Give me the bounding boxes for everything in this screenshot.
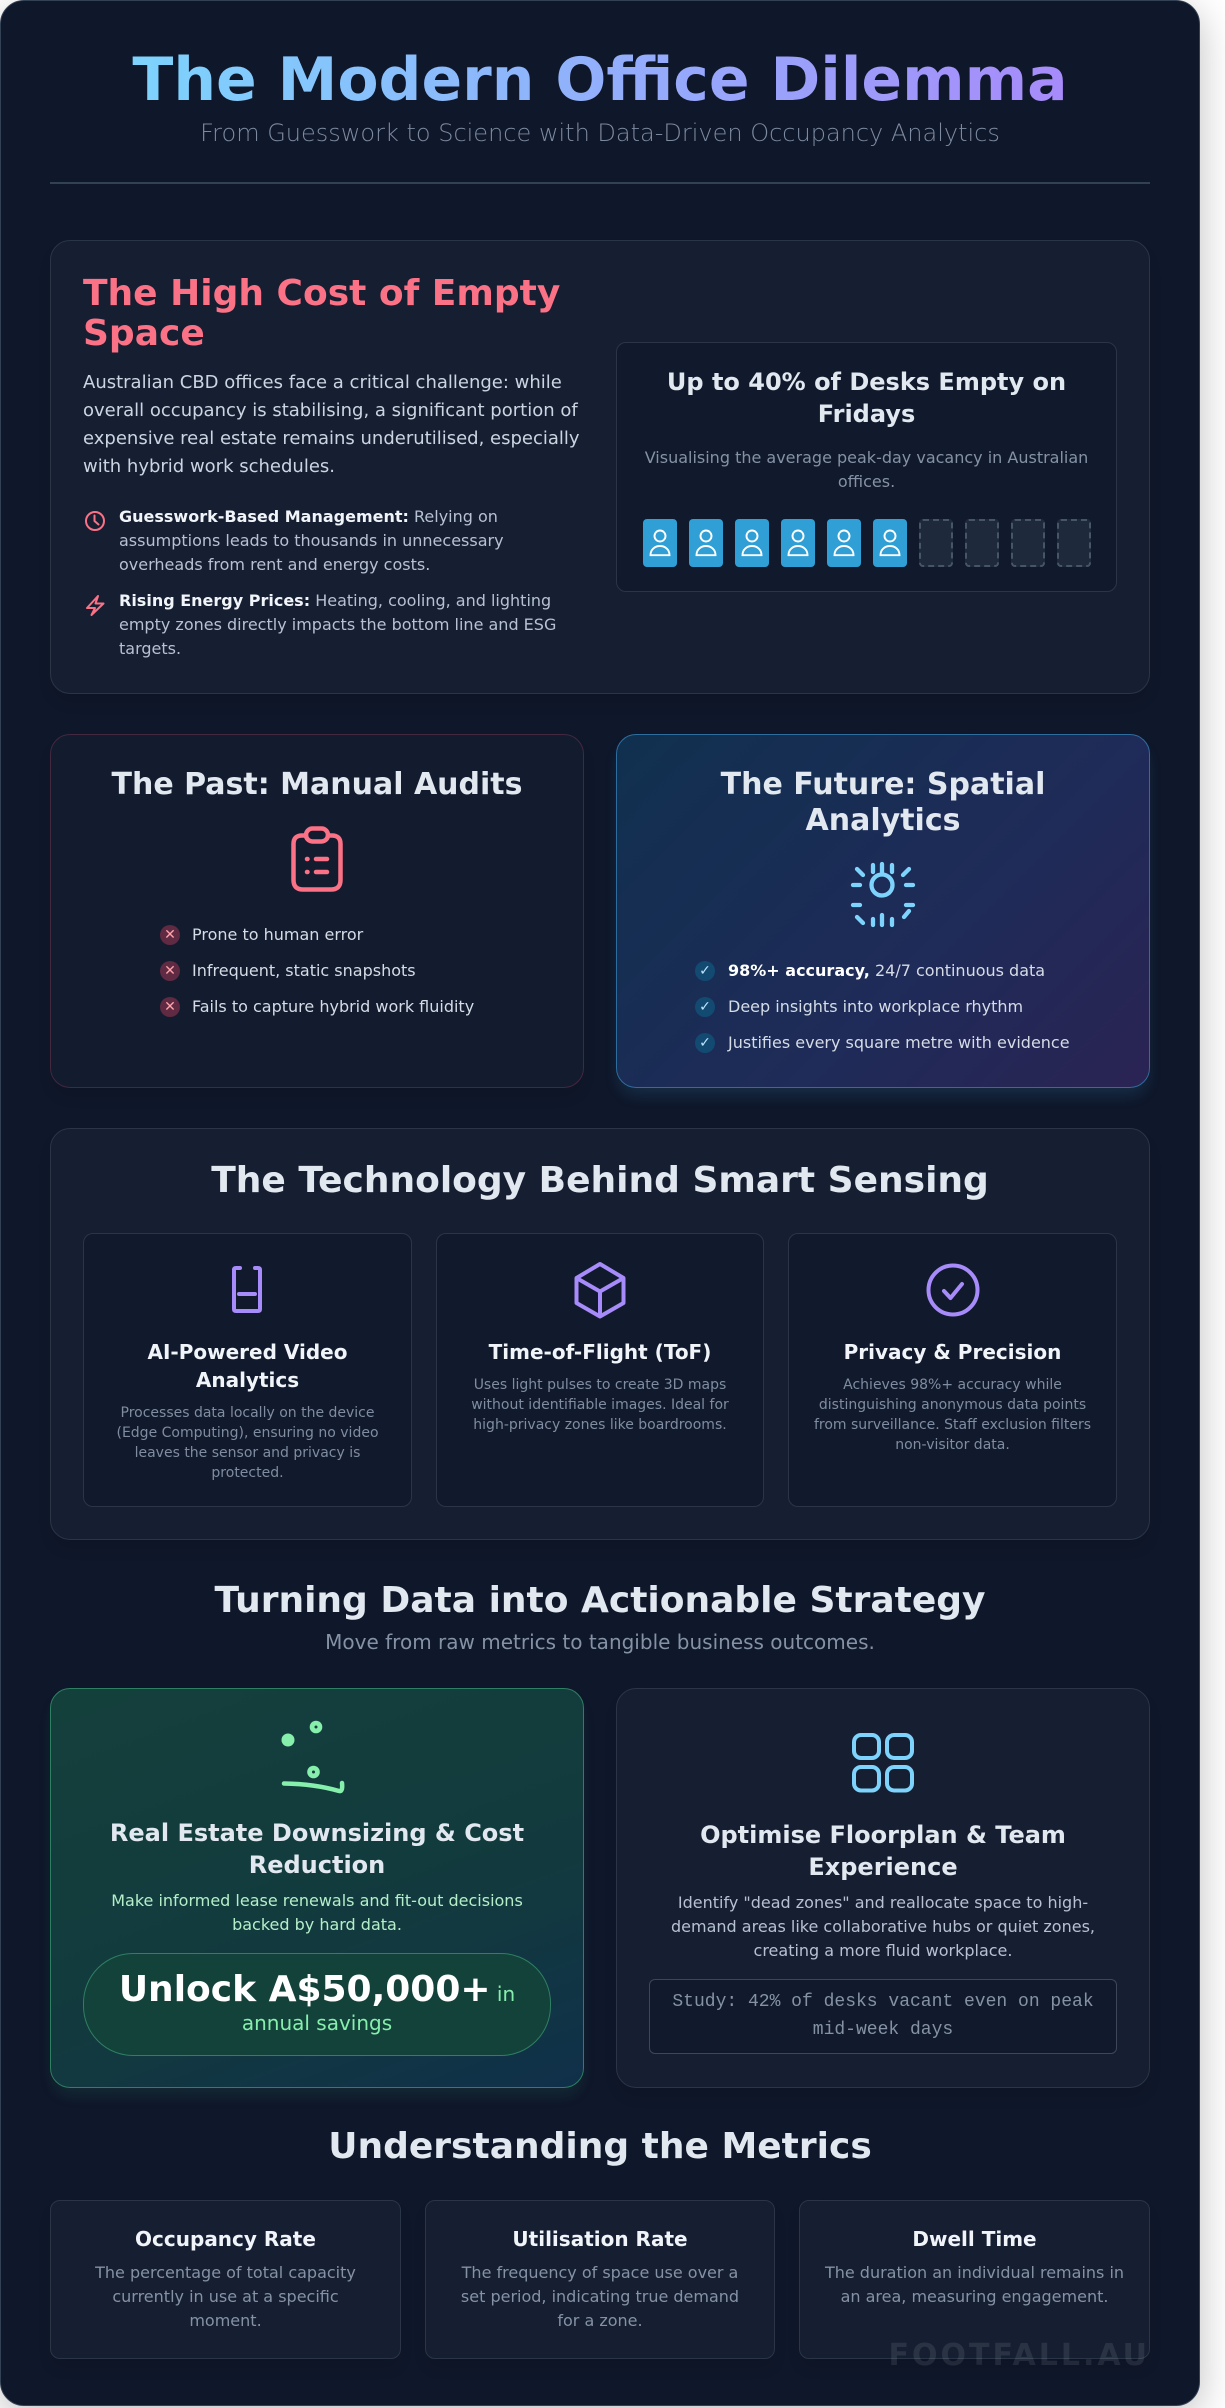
heading: actionable strategy: Turning Data into Actionable Strategy <box>214 1580 986 1621</box>
study callout <box>649 1979 1117 2054</box>
heading: past: The Past: Manual Audits <box>112 767 522 802</box>
panel: downsizing <box>50 1688 584 2088</box>
AI video heading: AI-Powered Video Analytics <box>148 1340 347 1392</box>
panel: desk vacancy visual <box>616 342 1117 592</box>
vacancy caption: Visualising the average peak-day vacancy in Australian offices. <box>645 448 1088 491</box>
ToF text: Uses light pulses to create 3D maps without identifiable images. Ideal for high-privacy zones like boardrooms. <box>471 1377 729 1433</box>
bullet: energy: Rising Energy Prices: Heating, cooling, and lighting empty zones directly impacts the bottom line and ESG targets. <box>119 590 556 658</box>
future list: 98%+ accuracy, 24/7 continuous data <box>728 961 1045 980</box>
desk tiles chart <box>643 519 1091 567</box>
card: ToF <box>436 1233 764 1507</box>
past list: Infrequent, static snapshots <box>192 961 416 980</box>
utilisation text: The frequency of space use over a set period, indicating true demand for a zone. <box>461 2263 739 2330</box>
heading: vacancy: Up to 40% of Desks Empty on Fridays <box>667 368 1066 428</box>
future list: ✓ <box>699 999 711 1015</box>
heading: metrics: Understanding the Metrics <box>328 2126 872 2167</box>
utilisation heading: Utilisation Rate <box>512 2227 688 2251</box>
panel: optimise <box>616 1688 1150 2088</box>
dwell text: The duration an individual remains in an area, measuring engagement. <box>825 2263 1124 2306</box>
future list: Justifies every square metre with evidence <box>728 1033 1070 1052</box>
panel: technology <box>50 1128 1150 1540</box>
ToF heading: Time-of-Flight (ToF) <box>489 1340 711 1364</box>
intro paragraph: Australian CBD offices face a critical challenge: while overall occupancy is stabilising, a significant portion of expensive real estate remains underutilised, especially with hybrid work schedules. <box>83 372 580 477</box>
past list: ✕ <box>164 927 176 943</box>
downsizing heading: Real Estate Downsizing & Cost Reduction <box>110 1819 524 1879</box>
card: dwell <box>799 2200 1150 2359</box>
occupancy text: The percentage of total capacity currently in use at a specific moment. <box>95 2263 356 2330</box>
past list: Fails to capture hybrid work fluidity <box>192 997 474 1016</box>
future list <box>695 961 1070 1053</box>
dwell heading: Dwell Time <box>912 2227 1037 2251</box>
bullet: guesswork: Guesswork-Based Management: Relying on assumptions leads to thousands in unnecessary overheads from rent and energy costs. <box>119 506 504 574</box>
card: privacy <box>788 1233 1117 1507</box>
past list: Prone to human error <box>192 925 363 944</box>
occupancy heading: Occupancy Rate <box>135 2227 316 2251</box>
panel: the past <box>50 734 584 1088</box>
savings pill: Unlock A$50,000+ in annual savings <box>119 1969 515 2035</box>
panel: the high cost of empty space <box>50 240 1150 694</box>
future list: ✓ <box>699 1035 711 1051</box>
heading: technology: The Technology Behind Smart Sensing <box>211 1160 989 1201</box>
past list <box>160 925 474 1017</box>
future list: ✓ <box>699 963 711 979</box>
privacy heading: Privacy & Precision <box>844 1340 1061 1364</box>
optimise text: Identify "dead zones" and reallocate space to high-demand areas like collaborative hubs or quiet zones, creating a more fluid workplace. <box>671 1893 1095 1960</box>
sub-heading: actionable strategy: Move from raw metrics to tangible business outcomes. <box>325 1630 875 1654</box>
downsizing text: Make informed lease renewals and fit-out decisions backed by hard data. <box>111 1891 523 1934</box>
subtitle: From Guesswork to Science with Data-Driven Occupancy Analytics <box>200 119 1000 147</box>
past list: ✕ <box>164 963 176 979</box>
optimise heading: Optimise Floorplan & Team Experience <box>700 1821 1066 1881</box>
heading: future: The Future: Spatial Analytics <box>721 767 1045 838</box>
study callout: Study: 42% of desks vacant even on peak mid-week days <box>672 1992 1094 2040</box>
title: The Modern Office Dilemma <box>132 45 1068 115</box>
future list: Deep insights into workplace rhythm <box>728 997 1023 1016</box>
AI video text: Processes data locally on the device (Edge Computing), ensuring no video leaves the sensor and privacy is protected. <box>116 1405 379 1481</box>
panel: the future <box>616 734 1150 1088</box>
card: occupancy <box>50 2200 401 2359</box>
past list: ✕ <box>164 999 176 1015</box>
privacy text: Achieves 98%+ accuracy while distinguishing anonymous data points from surveillance. Staff exclusion filters non-visitor data. <box>814 1377 1091 1453</box>
heading: high cost: The High Cost of Empty Space <box>83 273 560 354</box>
card: AI video <box>83 1233 412 1507</box>
card: utilisation <box>425 2200 775 2359</box>
savings pill <box>83 1953 551 2056</box>
watermark: FOOTFALL.AU <box>888 2338 1150 2373</box>
